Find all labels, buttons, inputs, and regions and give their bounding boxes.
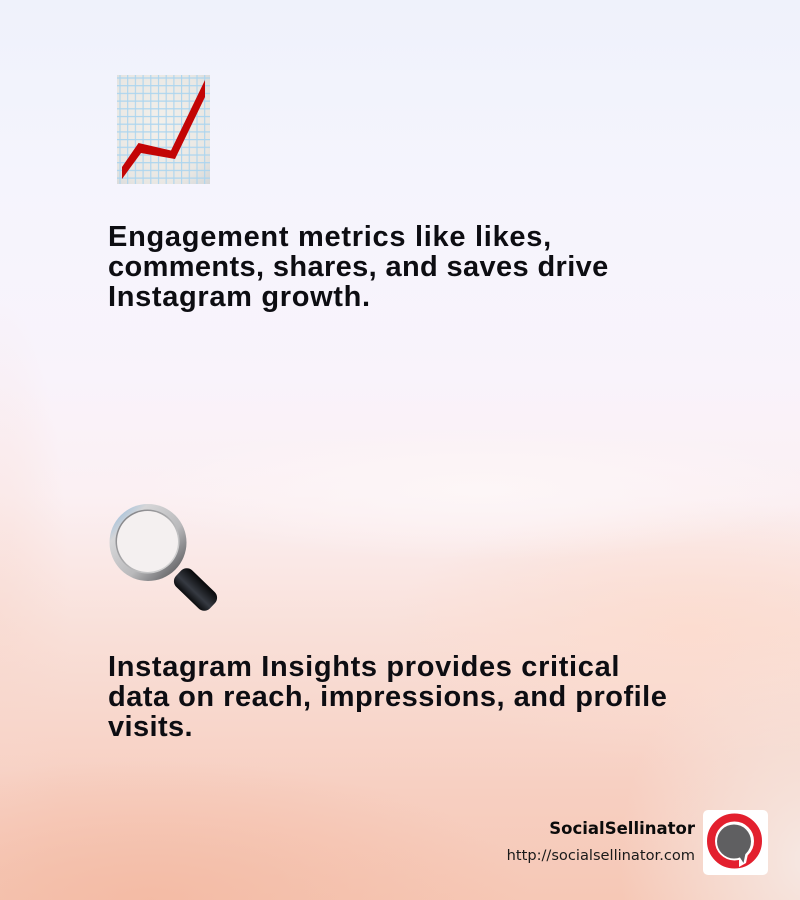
lens rim xyxy=(110,504,186,581)
heading: instagram insights: Instagram Insights provides critical xyxy=(108,651,620,683)
icon: chart with rising red line xyxy=(117,75,210,184)
heading: engagement metrics: comments, shares, and saves drive xyxy=(108,251,609,283)
lens xyxy=(117,511,178,572)
inner rim xyxy=(116,510,180,574)
brand url: http://socialsellinator.com xyxy=(507,847,695,864)
heading: instagram insights xyxy=(108,651,667,743)
rising red line xyxy=(122,80,205,179)
heading: instagram insights: visits. xyxy=(108,711,193,743)
brand name: SocialSellinator xyxy=(549,819,695,838)
heading: instagram insights: data on reach, impressions, and profile xyxy=(108,681,667,713)
heading: engagement metrics: Instagram growth. xyxy=(108,281,371,313)
handle xyxy=(171,565,220,614)
heading: engagement metrics: Engagement metrics like likes, xyxy=(108,221,552,253)
grey speech bubble xyxy=(717,824,751,867)
paper with grid xyxy=(117,75,210,184)
red ring xyxy=(711,818,758,864)
heading: engagement metrics xyxy=(108,221,609,313)
logo xyxy=(703,810,768,875)
icon: magnifying glass xyxy=(110,504,218,611)
